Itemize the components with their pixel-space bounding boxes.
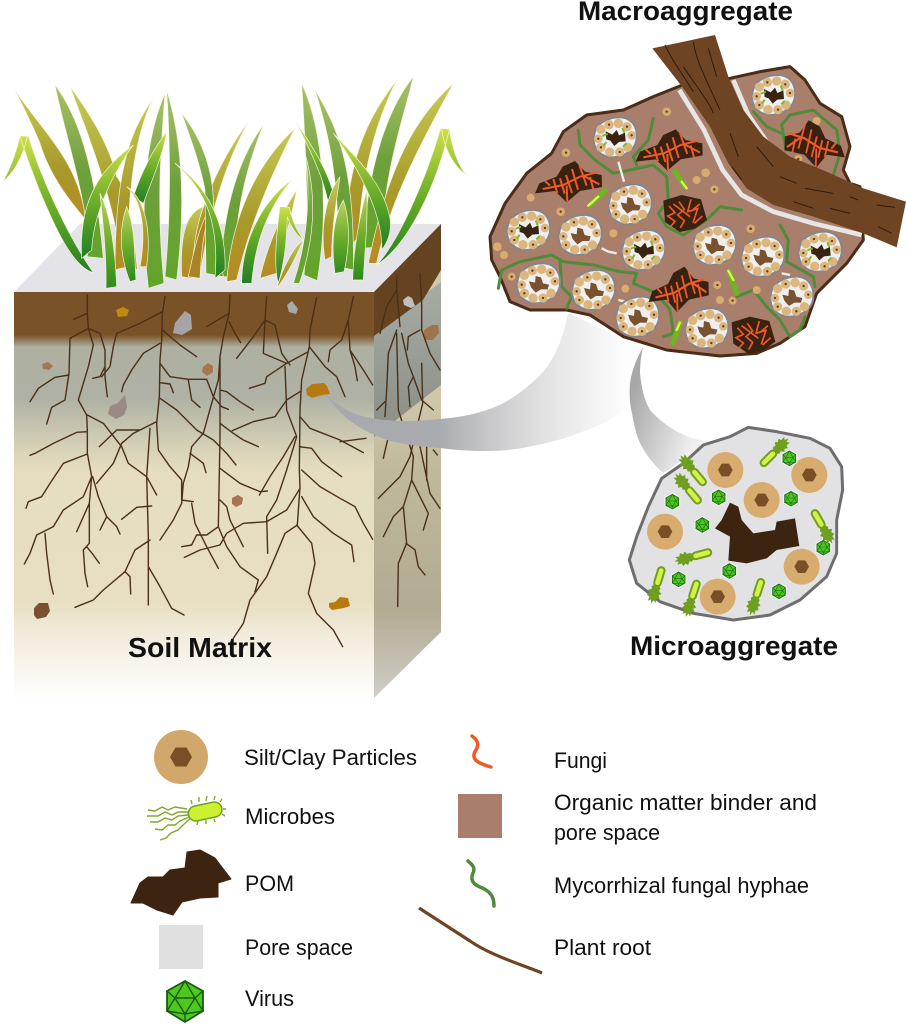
macroaggregate body [490,35,906,356]
legend: organic matter binder: Organic matter binder and [554,790,817,815]
POM centre [715,503,799,563]
legend: plant root [419,908,652,973]
microbes [644,433,838,619]
soil matrix title: Soil Matrix [128,632,272,663]
legend: pore space [159,925,353,969]
block side face [374,224,441,698]
soil block [14,224,441,700]
grass [3,77,467,288]
legend: fungi: Fungi [554,748,607,773]
legend: plant root: Plant root [554,935,652,960]
legend: organic matter binder: pore space [554,820,660,845]
small particles [493,107,821,305]
viruses [664,449,831,600]
legend: silt/clay particles [154,730,417,784]
legend [131,730,817,1022]
soil particles [34,296,439,619]
legend: virus [167,981,294,1022]
block top surface [14,224,441,292]
bright microbes [588,172,737,343]
microaggregate [629,427,843,661]
legend: mycorrhizal hyphae: Mycorrhizal fungal hyphae [554,873,809,898]
legend: mycorrhizal hyphae [468,861,809,906]
legend: microbes [147,796,335,840]
funnel: soil matrix to macroaggregate [325,313,643,451]
POM with fungi [535,120,845,354]
funnel: macroaggregate to microaggregate [630,347,712,473]
silt and clay particles [647,452,827,615]
plant roots [24,273,440,647]
thick plant root [652,35,906,247]
legend: silt/clay particles: Silt/Clay Particles [244,745,417,770]
microaggregate title: Microaggregate [630,631,838,661]
hyphae [498,110,840,337]
legend: fungi [472,736,607,773]
microaggregates within macroaggregate [507,75,842,348]
legend: pore space: Pore space [245,935,353,960]
macroaggregate [490,0,906,356]
legend: organic matter binder [458,790,817,845]
legend: POM [131,850,294,915]
legend: virus: Virus [245,986,294,1011]
legend: POM: POM [245,871,294,896]
microaggregate body [629,427,843,620]
block front face [14,292,374,700]
legend: microbes: Microbes [245,804,335,829]
